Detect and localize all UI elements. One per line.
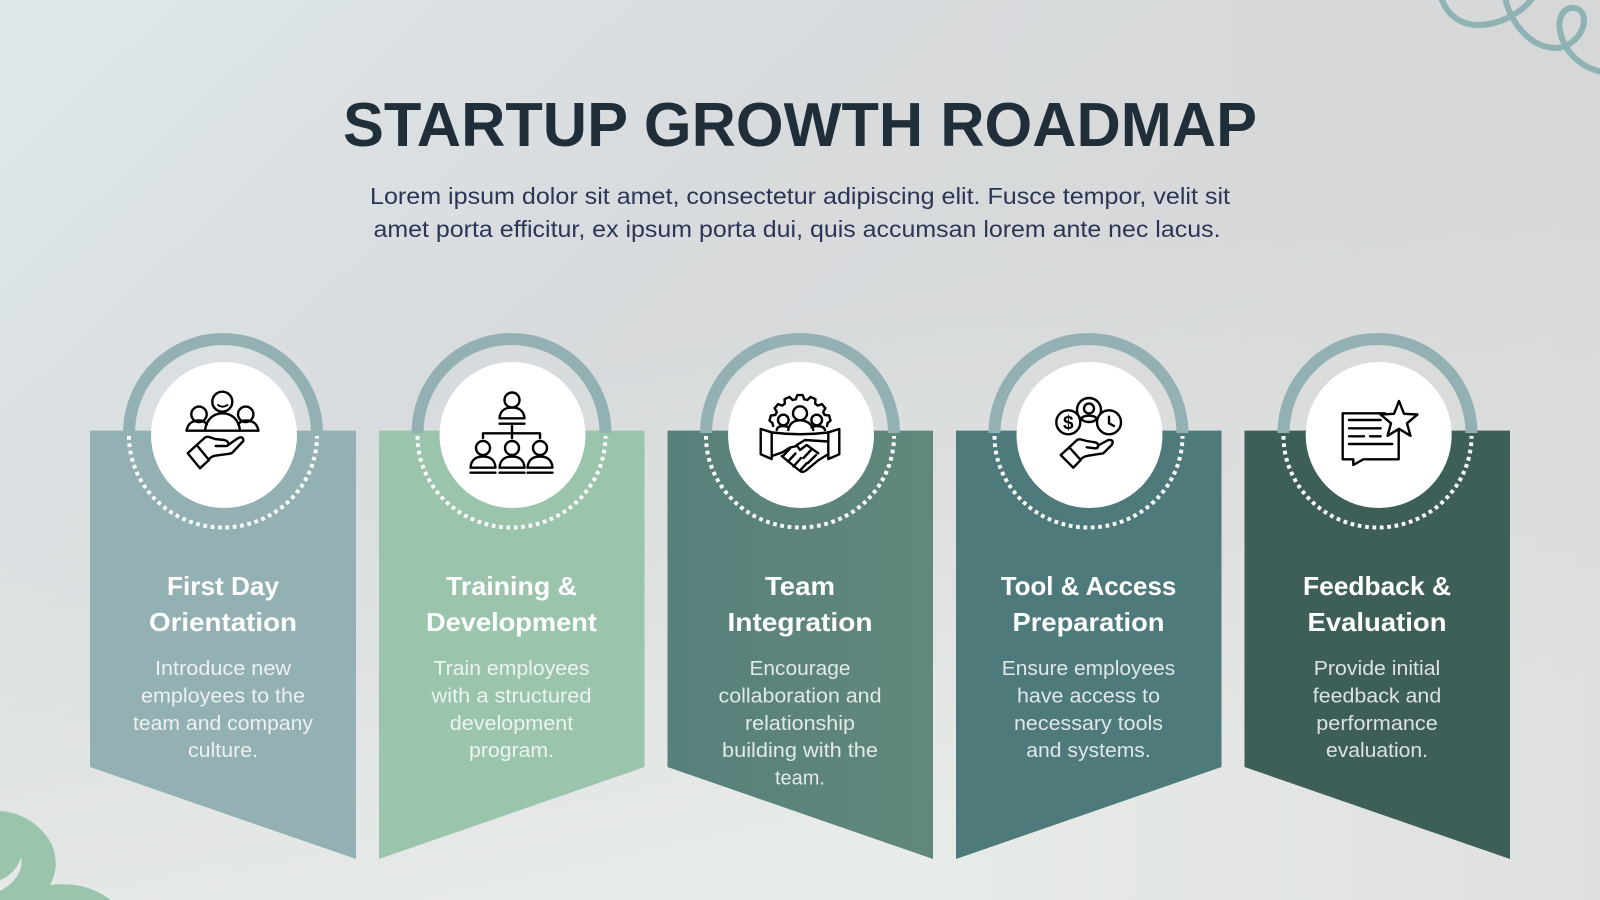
text: training description [430, 658, 592, 762]
icon: team on a hand [186, 392, 258, 468]
text: team description [718, 658, 882, 790]
text: training description: Train employees [434, 658, 590, 680]
text: team description: Encourage [750, 658, 850, 680]
decorative squiggle: top right [1441, 0, 1600, 72]
icon: feedback bubble with star [1343, 401, 1418, 465]
text: first day description: Introduce new [155, 658, 292, 680]
text: tool description [1002, 658, 1175, 762]
heading: first day orientation: First Day [167, 571, 280, 601]
text: training description: with a structured [430, 685, 592, 707]
icon: hand with money, person and clock [1056, 398, 1121, 468]
panel: tool and access preparation [956, 339, 1222, 859]
heading: feedback and evaluation: Evaluation [1308, 607, 1446, 637]
subtitle text block [370, 183, 1231, 242]
text: feedback description: performance [1316, 713, 1438, 735]
text: first day description [133, 658, 313, 762]
subtitle text block: amet porta efficitur, ex ipsum porta dui, quis accumsan lorem ante nec lacus. [374, 216, 1220, 242]
title: STARTUP GROWTH ROADMAP [343, 91, 1257, 160]
panel: first day orientation [90, 339, 356, 859]
decorative leaf blob: bottom left [0, 811, 113, 900]
heading: tool and access preparation [1001, 571, 1176, 637]
text: feedback description: Provide initial [1314, 658, 1440, 680]
heading: tool and access preparation: Tool & Access [1001, 571, 1176, 601]
heading: team integration: Integration [728, 607, 872, 637]
text: tool description: have access to [1017, 685, 1160, 707]
text: team description: collaboration and [718, 685, 882, 707]
panel: team integration [668, 339, 933, 859]
icon detail: dollar sign: $ [1063, 413, 1074, 434]
text: training description: program. [469, 740, 554, 762]
text: feedback description: feedback and [1313, 685, 1441, 707]
heading: team integration [728, 571, 872, 637]
text: tool description: necessary tools [1014, 713, 1163, 735]
heading: feedback and evaluation [1303, 571, 1451, 637]
text: first day description: employees to the [141, 685, 305, 707]
subtitle text block: Lorem ipsum dolor sit amet, consectetur adipiscing elit. Fusce tempor, velit sit [370, 183, 1231, 209]
panel: feedback and evaluation [1244, 339, 1510, 859]
text: team description: building with the [722, 740, 878, 762]
panel: training and development [379, 339, 644, 859]
heading: team integration: Team [765, 571, 835, 601]
text: first day description: culture. [188, 740, 258, 762]
text: feedback description: evaluation. [1326, 740, 1428, 762]
text: tool description: Ensure employees [1002, 658, 1175, 680]
heading: training and development [426, 571, 597, 637]
heading: feedback and evaluation: Feedback & [1303, 571, 1451, 601]
text: training description: development [450, 713, 574, 735]
text: first day description: team and company [133, 713, 313, 735]
heading: first day orientation [149, 571, 297, 637]
heading: tool and access preparation: Preparation [1012, 607, 1164, 637]
text: team description: relationship [745, 713, 855, 735]
text: tool description: and systems. [1026, 740, 1151, 762]
icon: org chart [470, 392, 552, 473]
text: feedback description [1313, 658, 1441, 762]
text: team description: team. [775, 768, 825, 790]
icon: gear and handshake [761, 395, 839, 472]
heading: first day orientation: Orientation [149, 607, 297, 637]
heading: training and development: Training & [446, 571, 577, 601]
heading: training and development: Development [426, 607, 597, 637]
